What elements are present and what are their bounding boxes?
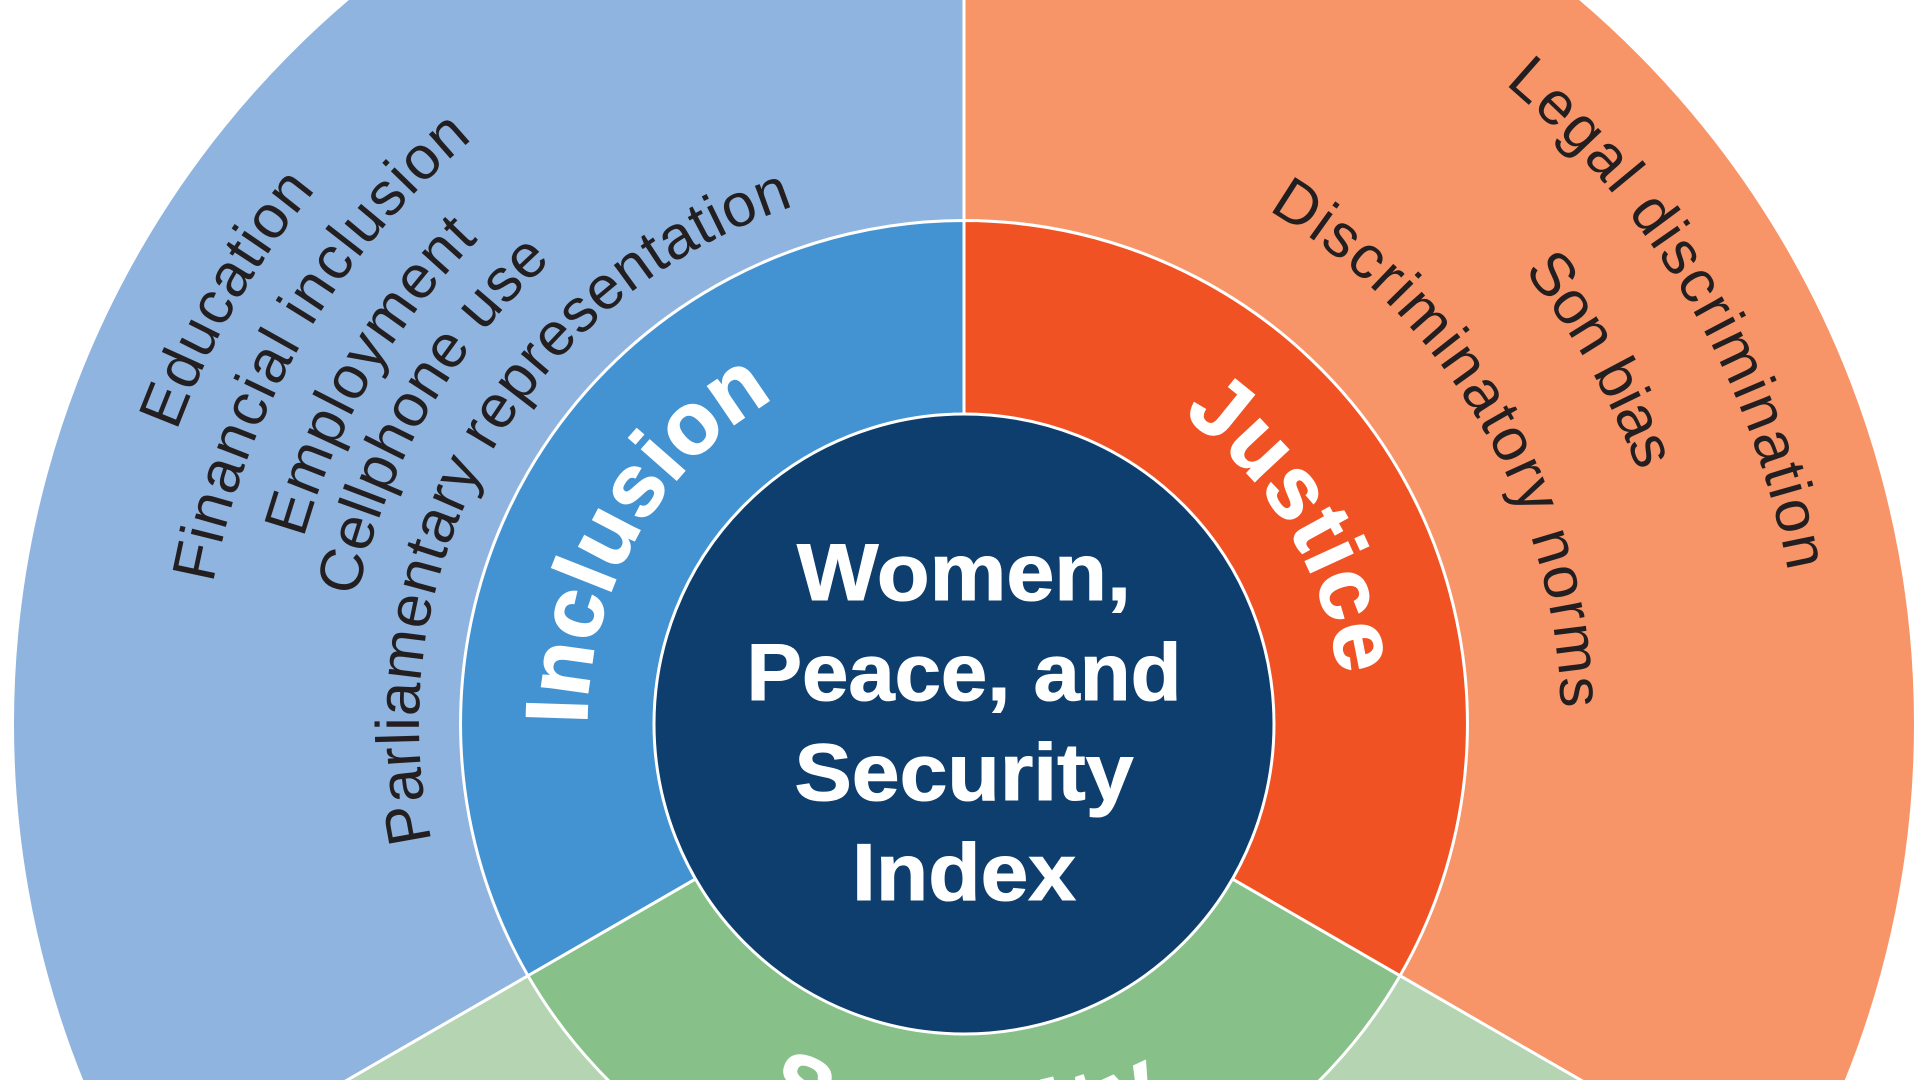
title: Women, Peace, and Security Index: Security xyxy=(794,728,1134,818)
heading: Justice: Justice xyxy=(1190,378,1383,670)
title: Women, Peace, and Security Index xyxy=(746,528,1182,918)
text: Education: Education xyxy=(139,176,314,427)
text: Parliamentary representation: Parliamentary representation xyxy=(374,179,790,844)
panel: middle ring, inclusion xyxy=(459,219,962,975)
title: Women, Peace, and Security Index: Women, xyxy=(797,528,1131,618)
text: Son bias: Son bias xyxy=(1530,253,1665,467)
text: Cellphone use: Cellphone use xyxy=(320,244,545,590)
panel: centre circle with index title xyxy=(654,414,1274,1034)
text: Legal discrimination: Legal discrimination xyxy=(1508,56,1818,568)
text: Financial inclusion: Financial inclusion xyxy=(172,120,470,579)
text: Employment: Employment xyxy=(264,217,478,534)
heading: Inclusion: Inclusion xyxy=(526,366,770,719)
panel: outer ring, security indicators xyxy=(140,724,1788,1080)
text: Discriminatory norms: Discriminatory norms xyxy=(1272,177,1593,706)
panel: middle ring, justice xyxy=(966,219,1469,975)
title: Women, Peace, and Security Index: Index xyxy=(852,828,1076,918)
panel: outer ring, inclusion indicators xyxy=(14,0,962,1080)
panel: outer ring, justice indicators xyxy=(966,0,1914,1080)
title: Women, Peace, and Security Index: Peace, and xyxy=(746,628,1182,718)
panel: middle ring, security xyxy=(528,878,1400,1080)
